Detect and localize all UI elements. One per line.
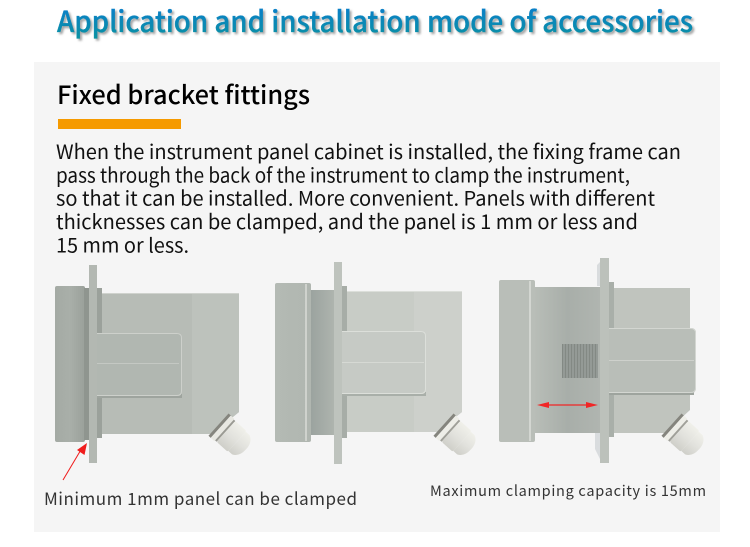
heading: Fixed bracket fittings <box>57 76 310 112</box>
description text <box>56 136 681 258</box>
description text: pass through the back of the instrument to clamp the instrument, <box>56 160 630 188</box>
description text: When the instrument panel cabinet is installed, the fixing frame can <box>56 136 681 165</box>
cable gland <box>661 414 709 461</box>
cable gland <box>433 414 481 461</box>
product photo: middle view <box>275 262 481 464</box>
cable gland <box>208 414 256 461</box>
red arrow <box>63 443 87 480</box>
heading accent bar <box>58 119 181 129</box>
description text: thicknesses can be clamped, and the panel is 1 mm or less and <box>56 206 638 235</box>
title: Application and installation mode of accessories <box>57 0 693 41</box>
product photo: minimum panel clamp <box>55 265 256 480</box>
caption: maximum clamp: Maximum clamping capacity is 15mm <box>430 480 706 501</box>
red double arrow <box>537 402 598 408</box>
product photo: maximum clamp <box>499 258 709 463</box>
description text: 15 mm or less. <box>56 230 189 258</box>
description text: so that it can be installed. More convenient. Panels with different <box>56 182 655 212</box>
panel: fixed bracket fittings <box>34 62 720 532</box>
caption: minimum clamp: Minimum 1mm panel can be clamped <box>44 485 357 510</box>
vent slots <box>562 344 598 378</box>
